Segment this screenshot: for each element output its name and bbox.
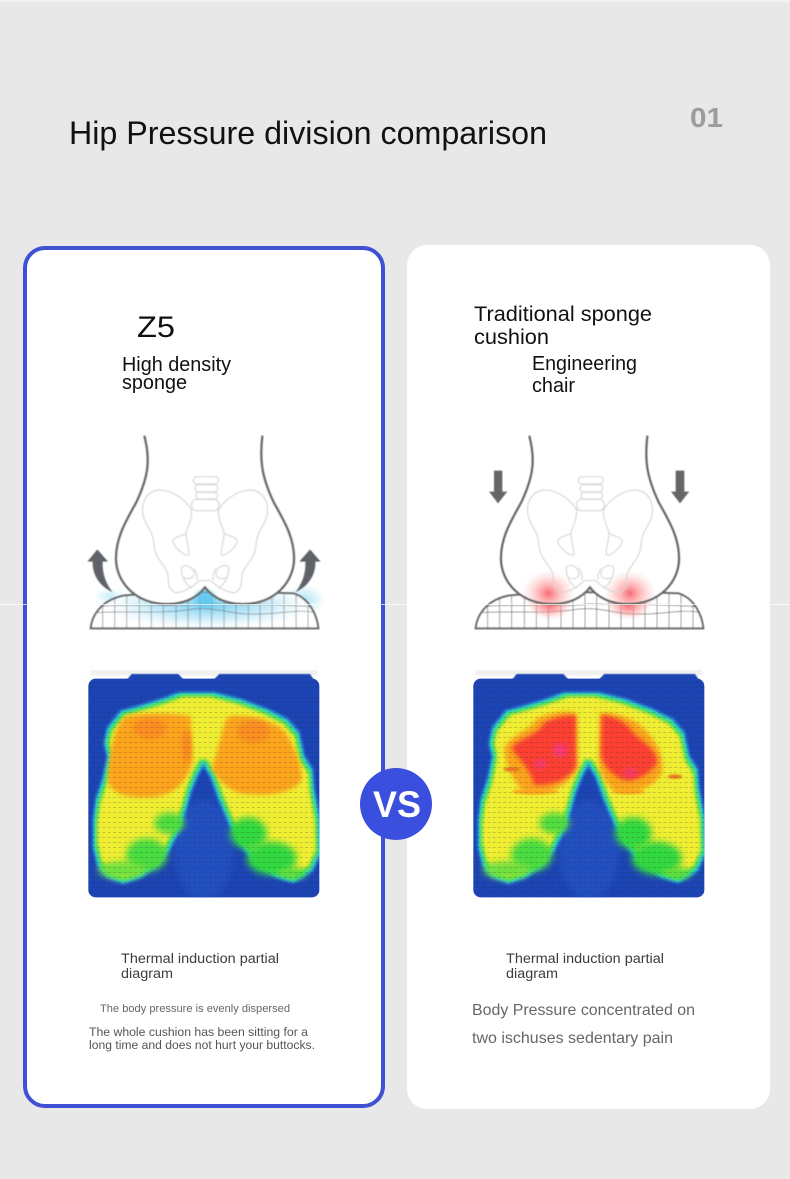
pressure glow	[522, 570, 657, 617]
caption: thermal induction: diagram	[506, 966, 558, 981]
subheading: engineering chair: chair	[532, 375, 575, 397]
caption: thermal induction	[121, 951, 279, 981]
VS badge	[360, 768, 432, 840]
subheading: high density sponge	[122, 354, 231, 394]
hip outline	[501, 436, 679, 604]
faint horizontal line	[0, 604, 790, 605]
subheading: high density sponge: sponge	[122, 372, 187, 394]
subheading: engineering chair	[532, 353, 637, 397]
text: concentrated pressure	[472, 1002, 695, 1047]
arrow: left up	[87, 549, 113, 592]
caption: thermal induction: Thermal induction partial	[506, 951, 664, 966]
diagram: hips on high density cushion	[87, 436, 327, 629]
heading: traditional sponge cushion: Traditional sponge	[474, 303, 652, 326]
text: concentrated pressure: Body Pressure concentrated on	[472, 1002, 695, 1019]
caption: thermal induction: diagram	[121, 966, 173, 981]
panel: Z5 high density sponge	[25, 248, 383, 1106]
section number: 01	[690, 102, 723, 133]
text: cushion description: long time and does not hurt your buttocks.	[89, 1038, 315, 1052]
text: concentrated pressure: two ischuses sedentary pain	[472, 1030, 673, 1047]
heat map: concentrated pressure	[473, 670, 704, 900]
cushion	[91, 581, 327, 629]
panel: traditional sponge cushion	[407, 245, 770, 1109]
heading: traditional sponge cushion: cushion	[474, 326, 549, 349]
caption: thermal induction: Thermal induction partial	[121, 951, 279, 966]
cushion	[476, 592, 703, 628]
heading: traditional sponge cushion	[474, 303, 652, 349]
subheading: engineering chair: Engineering	[532, 353, 637, 375]
text: cushion description	[89, 1025, 315, 1052]
pelvis	[143, 477, 267, 593]
diagram: hips on traditional cushion	[476, 436, 703, 628]
title: Hip Pressure division comparison	[69, 115, 547, 151]
arrow: right up	[295, 549, 321, 592]
arrow: right down	[671, 471, 689, 503]
VS badge: VS	[373, 784, 421, 825]
arrow: left down	[489, 471, 507, 503]
text: evenly dispersed: The body pressure is evenly dispersed	[100, 1003, 290, 1015]
hip outline	[116, 436, 294, 604]
heat map: evenly dispersed pressure	[88, 670, 319, 900]
text: cushion description: The whole cushion has been sitting for a	[89, 1025, 308, 1039]
heading: Z5: Z5	[137, 311, 175, 344]
caption: thermal induction	[506, 951, 664, 981]
pelvis	[528, 477, 652, 593]
subheading: high density sponge: High density	[122, 354, 231, 376]
